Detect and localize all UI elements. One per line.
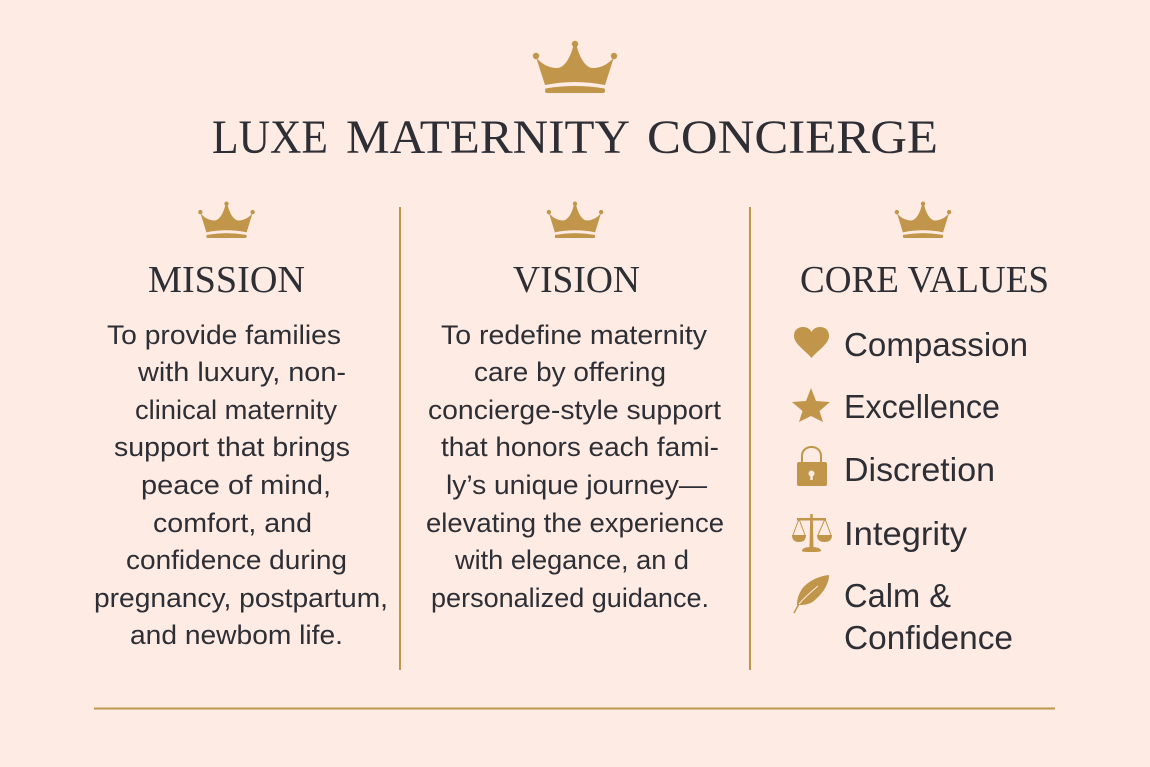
text block: mission statement: peace of mind, xyxy=(141,470,331,500)
title xyxy=(212,111,938,164)
icon: heart xyxy=(794,327,829,358)
icon: lock xyxy=(797,447,827,486)
icon: star xyxy=(792,388,830,422)
panel: mission xyxy=(94,201,388,650)
value: discretion: Discretion xyxy=(844,451,995,488)
value: calm and confidence xyxy=(844,577,1013,656)
title: LUXE xyxy=(212,111,328,164)
text block: mission statement: To provide families xyxy=(107,320,341,350)
text block: vision statement: with elegance, an d xyxy=(454,545,689,575)
icon: vision crown xyxy=(547,201,603,238)
value: calm and confidence: Calm & xyxy=(844,577,951,614)
text block: mission statement: support that brings xyxy=(114,432,350,462)
panel: vision xyxy=(426,201,724,613)
heading: vision: VISION xyxy=(513,259,640,301)
value: integrity: Integrity xyxy=(844,515,968,552)
text block: vision statement xyxy=(426,320,724,613)
icon: scales xyxy=(792,514,832,552)
title: CONCIERGE xyxy=(647,111,938,164)
heading: mission: MISSION xyxy=(148,259,305,301)
text block: mission statement: comfort, and xyxy=(153,508,312,538)
heading: core values: CORE VALUES xyxy=(800,259,1049,301)
panel: core values xyxy=(792,201,1049,656)
value: calm and confidence: Confidence xyxy=(844,619,1013,656)
text block: vision statement: ly’s unique journey— xyxy=(446,470,707,500)
text block: vision statement: personalized guidance. xyxy=(431,583,709,613)
text block: mission statement: pregnancy, postpartum, xyxy=(94,583,388,613)
value: excellence: Excellence xyxy=(844,388,1000,425)
text block: mission statement xyxy=(94,320,388,650)
text block: vision statement: care by offering xyxy=(474,357,666,387)
title: MATERNITY xyxy=(346,111,630,164)
text block: mission statement: clinical maternity xyxy=(135,395,338,425)
text block: mission statement: with luxury, non- xyxy=(137,357,346,387)
icon: feather xyxy=(794,575,829,613)
text block: vision statement: that honors each fami- xyxy=(441,432,719,462)
text block: vision statement: concierge-style support xyxy=(428,395,722,425)
icon: mission crown xyxy=(198,201,255,238)
icon: core values crown xyxy=(895,201,951,238)
value: compassion: Compassion xyxy=(844,326,1028,363)
icon: main crown xyxy=(533,41,617,93)
text block: vision statement: elevating the experience xyxy=(426,508,724,538)
text block: mission statement: confidence during xyxy=(126,545,347,575)
text block: vision statement: To redefine maternity xyxy=(441,320,708,350)
text block: mission statement: and newbom life. xyxy=(130,620,343,650)
